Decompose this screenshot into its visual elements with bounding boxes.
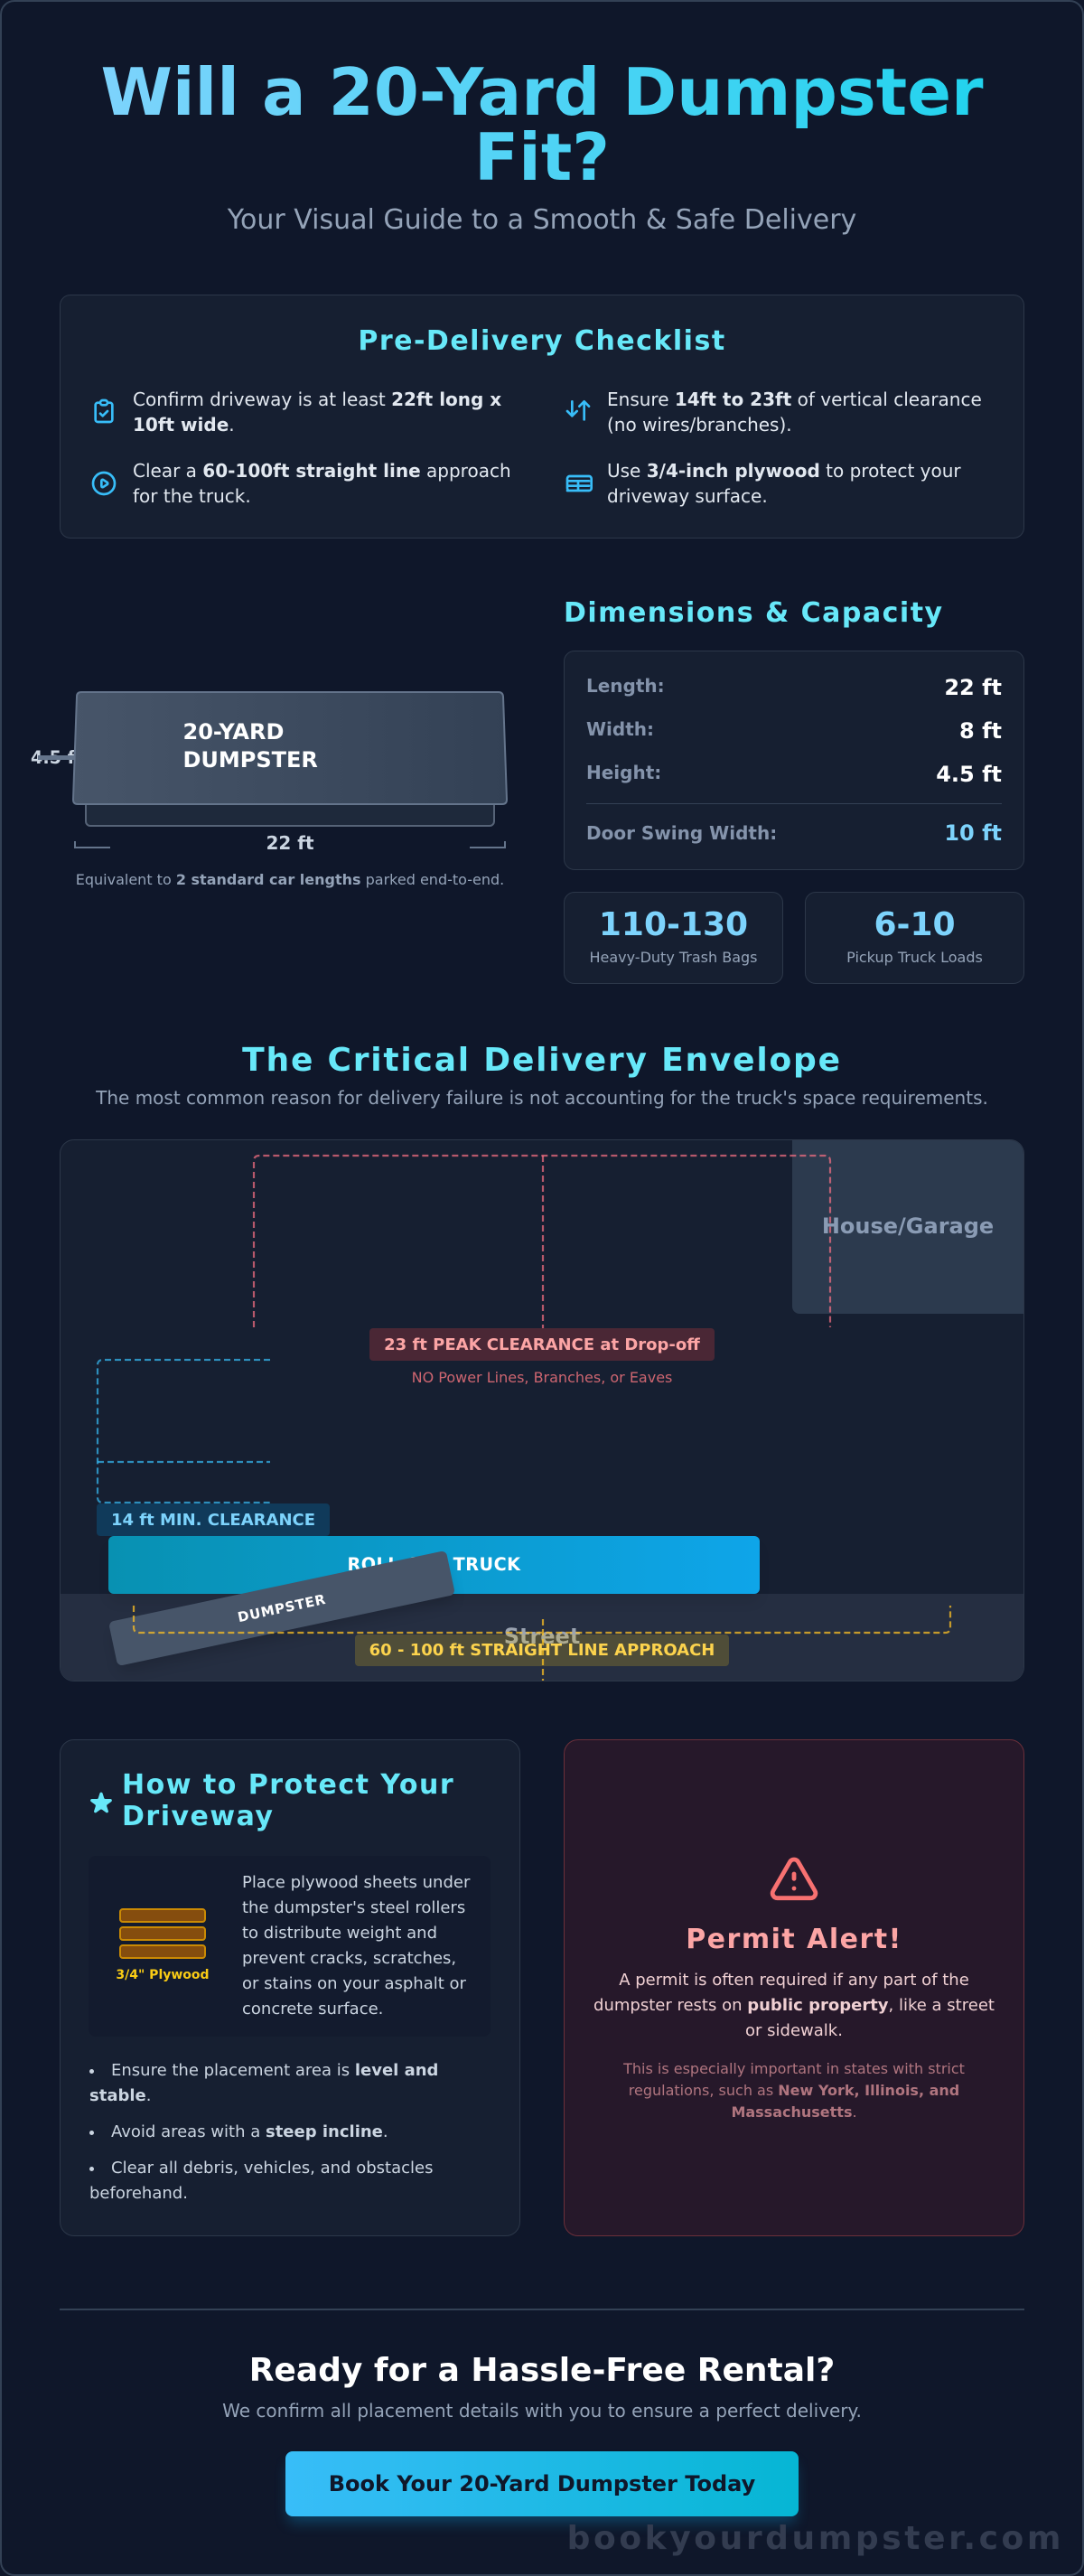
label: no power lines: NO Power Lines, Branches, or Eaves [412, 1369, 672, 1386]
envelope heading: The Critical Delivery Envelope [242, 1042, 842, 1079]
length dimension: 22 ft: 22 ft [266, 832, 314, 854]
street label: Street [504, 1624, 580, 1649]
house label: House/Garage [822, 1213, 994, 1239]
title [100, 54, 984, 195]
row label: length: Length: [586, 675, 665, 697]
permit paragraph: A permit is often required if any part of the [619, 1971, 969, 1990]
permit paragraph: dumpster rests on public property, like a street [593, 1996, 995, 2015]
checklist item: vertical clearance: (no wires/branches). [607, 414, 792, 436]
house and garage block [792, 1139, 1025, 1314]
checklist heading: Pre-Delivery Checklist [358, 325, 726, 357]
height marker line [38, 755, 76, 760]
checklist item: straight line approach: Clear a 60-100ft straight line approach [133, 460, 511, 482]
panel: pre-delivery checklist [60, 295, 1024, 539]
dimensions heading: Dimensions & Capacity [564, 597, 944, 629]
dumpster label [182, 719, 318, 773]
permit state note: Massachusetts. [731, 2103, 857, 2121]
plywood paragraph: to distribute weight and [242, 1924, 437, 1943]
row value: length: 22 ft [944, 675, 1002, 700]
protection tips list [89, 2061, 438, 2203]
row label: door swing: Door Swing Width: [586, 822, 777, 844]
watermark: bookyourdumpster.com [567, 2520, 1064, 2557]
dumpster on rollers [108, 1550, 455, 1666]
car length caption: Equivalent to 2 standard car lengths parked end-to-end. [76, 871, 504, 888]
label: peak clearance [369, 1328, 715, 1361]
plywood paragraph: concrete surface. [242, 2000, 383, 2019]
row value: door swing: 10 ft [944, 820, 1002, 846]
panel: permit alert [564, 1739, 1024, 2236]
approach path outline [134, 1606, 950, 1681]
plywood explainer box [89, 1856, 491, 2037]
panel: dimensions table [564, 651, 1024, 870]
stat: pickup loads [805, 892, 1024, 984]
protect heading [122, 1769, 454, 1832]
panel: protect your driveway [60, 1739, 520, 2236]
plywood paragraph: prevent cracks, scratches, [242, 1949, 456, 1968]
plywood paragraph: Place plywood sheets under [242, 1873, 470, 1892]
stat number: 110-130 [599, 906, 748, 943]
stat number: 6-10 [874, 906, 956, 943]
label: minimum clearance: 14 ft MIN. CLEARANCE [111, 1511, 315, 1530]
title: Will a 20-Yard Dumpster [100, 54, 984, 130]
permit state note: This is especially important in states with strict [623, 2060, 965, 2077]
checklist item: straight line approach: for the truck. [133, 485, 251, 507]
icon: vertical arrows [565, 399, 591, 421]
permit state note: regulations, such as New York, Illinois, and [629, 2082, 959, 2099]
permit heading: Permit Alert! [686, 1924, 902, 1955]
dumpster label: DUMPSTER [182, 747, 318, 773]
label: straight line approach [355, 1635, 729, 1666]
stat label: Heavy-Duty Trash Bags [589, 949, 758, 966]
protection tips list: Ensure the placement area is level and stable. [89, 2061, 438, 2105]
checklist item: plywood [607, 460, 961, 507]
icon: warning triangle [770, 1858, 818, 1901]
call to action subtitle: We confirm all placement details with you to ensure a perfect delivery. [222, 2400, 862, 2421]
plywood paragraph: or stains on your asphalt or [242, 1974, 466, 1993]
dumpster label: 20-YARD [182, 719, 284, 745]
plywood paragraph: the dumpster's steel rollers [242, 1898, 465, 1917]
plywood paragraph [242, 1873, 470, 2019]
protect heading: Driveway [122, 1801, 274, 1832]
checklist item: plywood: driveway surface. [607, 485, 768, 507]
protection tips list: Avoid areas with a steep incline. [111, 2122, 388, 2141]
checklist item: driveway size [133, 389, 501, 436]
truck: ROLL-OFF TRUCK [347, 1554, 521, 1575]
permit paragraph [593, 1971, 995, 2040]
label: straight line approach: 60 - 100 ft STRAIGHT LINE APPROACH [369, 1641, 715, 1660]
icon: clipboard check [94, 399, 114, 423]
street band [61, 1594, 1023, 1682]
title: Fit? [474, 119, 610, 195]
permit state note [623, 2060, 965, 2121]
call to action heading: Ready for a Hassle-Free Rental? [249, 2352, 835, 2389]
checklist item: vertical clearance [607, 389, 982, 436]
plywood label: 3/4" Plywood [116, 1968, 210, 1982]
dumpster base [85, 795, 495, 827]
envelope subtitle: The most common reason for delivery failure is not accounting for the truck's space requirements. [96, 1087, 988, 1109]
stat: trash bags [564, 892, 783, 984]
checklist item: straight line approach [133, 460, 511, 507]
truck [108, 1536, 760, 1594]
panel: delivery envelope diagram [60, 1139, 1024, 1681]
minimum clearance outline [98, 1360, 270, 1503]
length bracket left [74, 841, 110, 848]
peak clearance outline [254, 1156, 830, 1328]
permit paragraph: or sidewalk. [745, 2021, 843, 2040]
dumpster on rollers: DUMPSTER [237, 1591, 327, 1625]
icon: play circle [92, 472, 116, 495]
height label: 4.5 ft: 4.5 ft [31, 747, 83, 768]
row label: height: Height: [586, 762, 661, 783]
protect heading: How to Protect Your [122, 1769, 454, 1801]
row value: width: 8 ft [959, 718, 1002, 744]
checklist item: driveway size: Confirm driveway is at least 22ft long x [133, 389, 501, 410]
label: peak clearance: 23 ft PEAK CLEARANCE at Drop-off [384, 1335, 700, 1354]
checklist item: vertical clearance: Ensure 14ft to 23ft of vertical clearance [607, 389, 982, 410]
row value: height: 4.5 ft [936, 762, 1002, 787]
checklist item: driveway size: 10ft wide. [133, 414, 235, 436]
dumpster body [72, 691, 508, 805]
call to action button: Book Your 20-Yard Dumpster Today [329, 2471, 755, 2496]
label: minimum clearance [97, 1503, 330, 1536]
row label: width: Width: [586, 718, 654, 740]
icon: plywood stack [119, 1908, 206, 1959]
length bracket right [470, 841, 506, 848]
protection tips list: Clear all debris, vehicles, and obstacles beforehand. [89, 2159, 433, 2203]
subtitle: Your Visual Guide to a Smooth & Safe Delivery [228, 204, 856, 236]
stat label: Pickup Truck Loads [846, 949, 983, 966]
checklist item: plywood: Use 3/4-inch plywood to protect your [607, 460, 961, 482]
icon: plywood table [565, 475, 593, 492]
icon: star [90, 1793, 112, 1813]
call to action button [285, 2451, 799, 2516]
